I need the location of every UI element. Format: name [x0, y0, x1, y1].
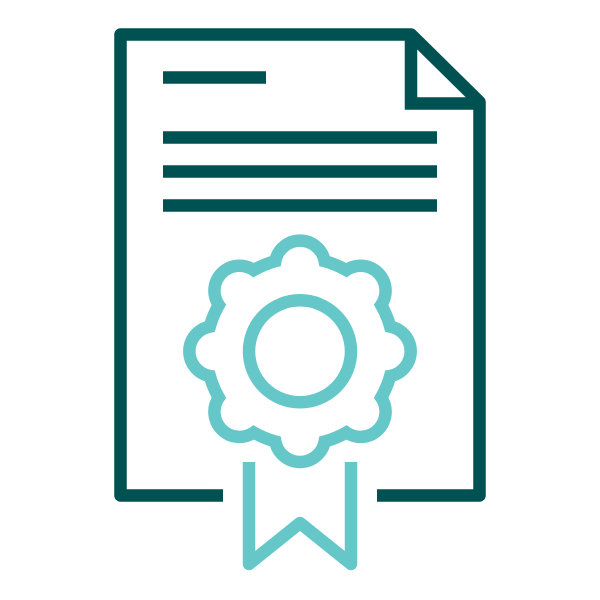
icon: rosette seal [189, 241, 411, 564]
ribbon [249, 462, 351, 564]
heading line [163, 71, 266, 84]
seal scalloped outline [189, 241, 411, 462]
document outline [120, 34, 480, 496]
folded corner [411, 34, 480, 104]
seal inner circle [249, 300, 351, 402]
icon: document [120, 34, 480, 496]
text lines [163, 138, 437, 206]
